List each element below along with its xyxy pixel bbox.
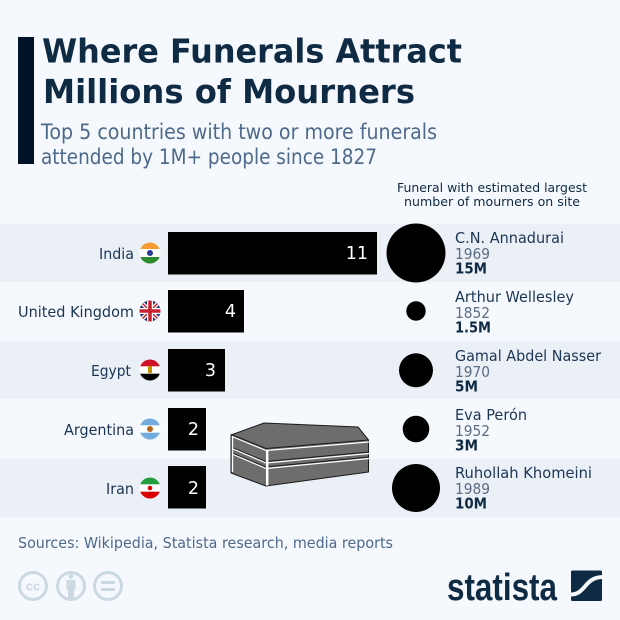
country labels: Egypt [91, 362, 131, 380]
subtitle: Top 5 countries with two or more funerals [40, 120, 437, 145]
icon: flag of Egypt [139, 359, 161, 381]
icon: coffin [231, 423, 369, 486]
funeral details: United Kingdom: 1.5M [455, 318, 491, 336]
title: Millions of Mourners [43, 72, 415, 111]
bar chart: funerals per country: 2 [188, 479, 199, 499]
title accent bar [18, 37, 34, 164]
funeral details: Argentina: Eva Perón [455, 406, 527, 424]
funeral details: United Kingdom [455, 288, 574, 336]
column header: Funeral with estimated largest [397, 180, 587, 195]
funeral details: India: C.N. Annadurai [455, 229, 564, 247]
funeral details: United Kingdom: 1852 [455, 304, 490, 322]
icon: flag of United Kingdom [139, 300, 161, 322]
country labels: United Kingdom [18, 303, 134, 321]
funeral details: Egypt: Gamal Abdel Nasser [455, 347, 602, 365]
icon: flag of Argentina [139, 418, 161, 440]
country labels: Argentina [64, 421, 134, 439]
funeral details: United Kingdom: Arthur Wellesley [455, 288, 574, 306]
bubbles: largest funeral attendance [386, 224, 446, 512]
bar chart: funerals per country: 3 [205, 361, 216, 381]
title: Where Funerals Attract [42, 32, 462, 70]
column header [397, 180, 587, 209]
subtitle: attended by 1M+ people since 1827 [41, 145, 377, 170]
country labels: India [99, 245, 134, 263]
bar chart: funerals per country: 4 [225, 302, 236, 322]
icons: creative commons licence [20, 572, 122, 600]
bar chart: funerals per country: 11 [346, 244, 368, 264]
funeral details: India [455, 229, 564, 278]
subtitle [40, 120, 437, 170]
sources: Sources: Wikipedia, Statista research, media reports [18, 534, 393, 552]
funeral details: Iran: 10M [455, 494, 487, 512]
funeral details: Egypt: 5M [455, 378, 478, 396]
title [42, 32, 462, 111]
country labels: Iran [106, 480, 134, 498]
funeral details: Argentina: 3M [455, 436, 478, 454]
icon: flag of Iran [139, 477, 161, 499]
funeral details: Iran: 1989 [455, 480, 490, 498]
funeral details: Argentina: 1952 [455, 422, 490, 440]
funeral details: India: 1969 [455, 245, 490, 263]
column header: number of mourners on site [404, 194, 580, 209]
bar chart: funerals per country: 2 [188, 420, 199, 440]
funeral details: Iran [455, 464, 592, 512]
country labels [18, 245, 134, 498]
funeral details: India: 15M [455, 260, 487, 278]
row backgrounds [0, 224, 620, 517]
funeral details: Iran: Ruhollah Khomeini [455, 464, 592, 482]
logo: statista: statista [447, 567, 558, 609]
bar chart: funerals per country [168, 232, 377, 508]
funeral details: Egypt [455, 347, 602, 396]
funeral details: Argentina [455, 406, 527, 454]
icons: creative commons licence: cc [26, 578, 40, 594]
funeral details: Egypt: 1970 [455, 363, 490, 381]
icon: flag of India [139, 242, 161, 264]
